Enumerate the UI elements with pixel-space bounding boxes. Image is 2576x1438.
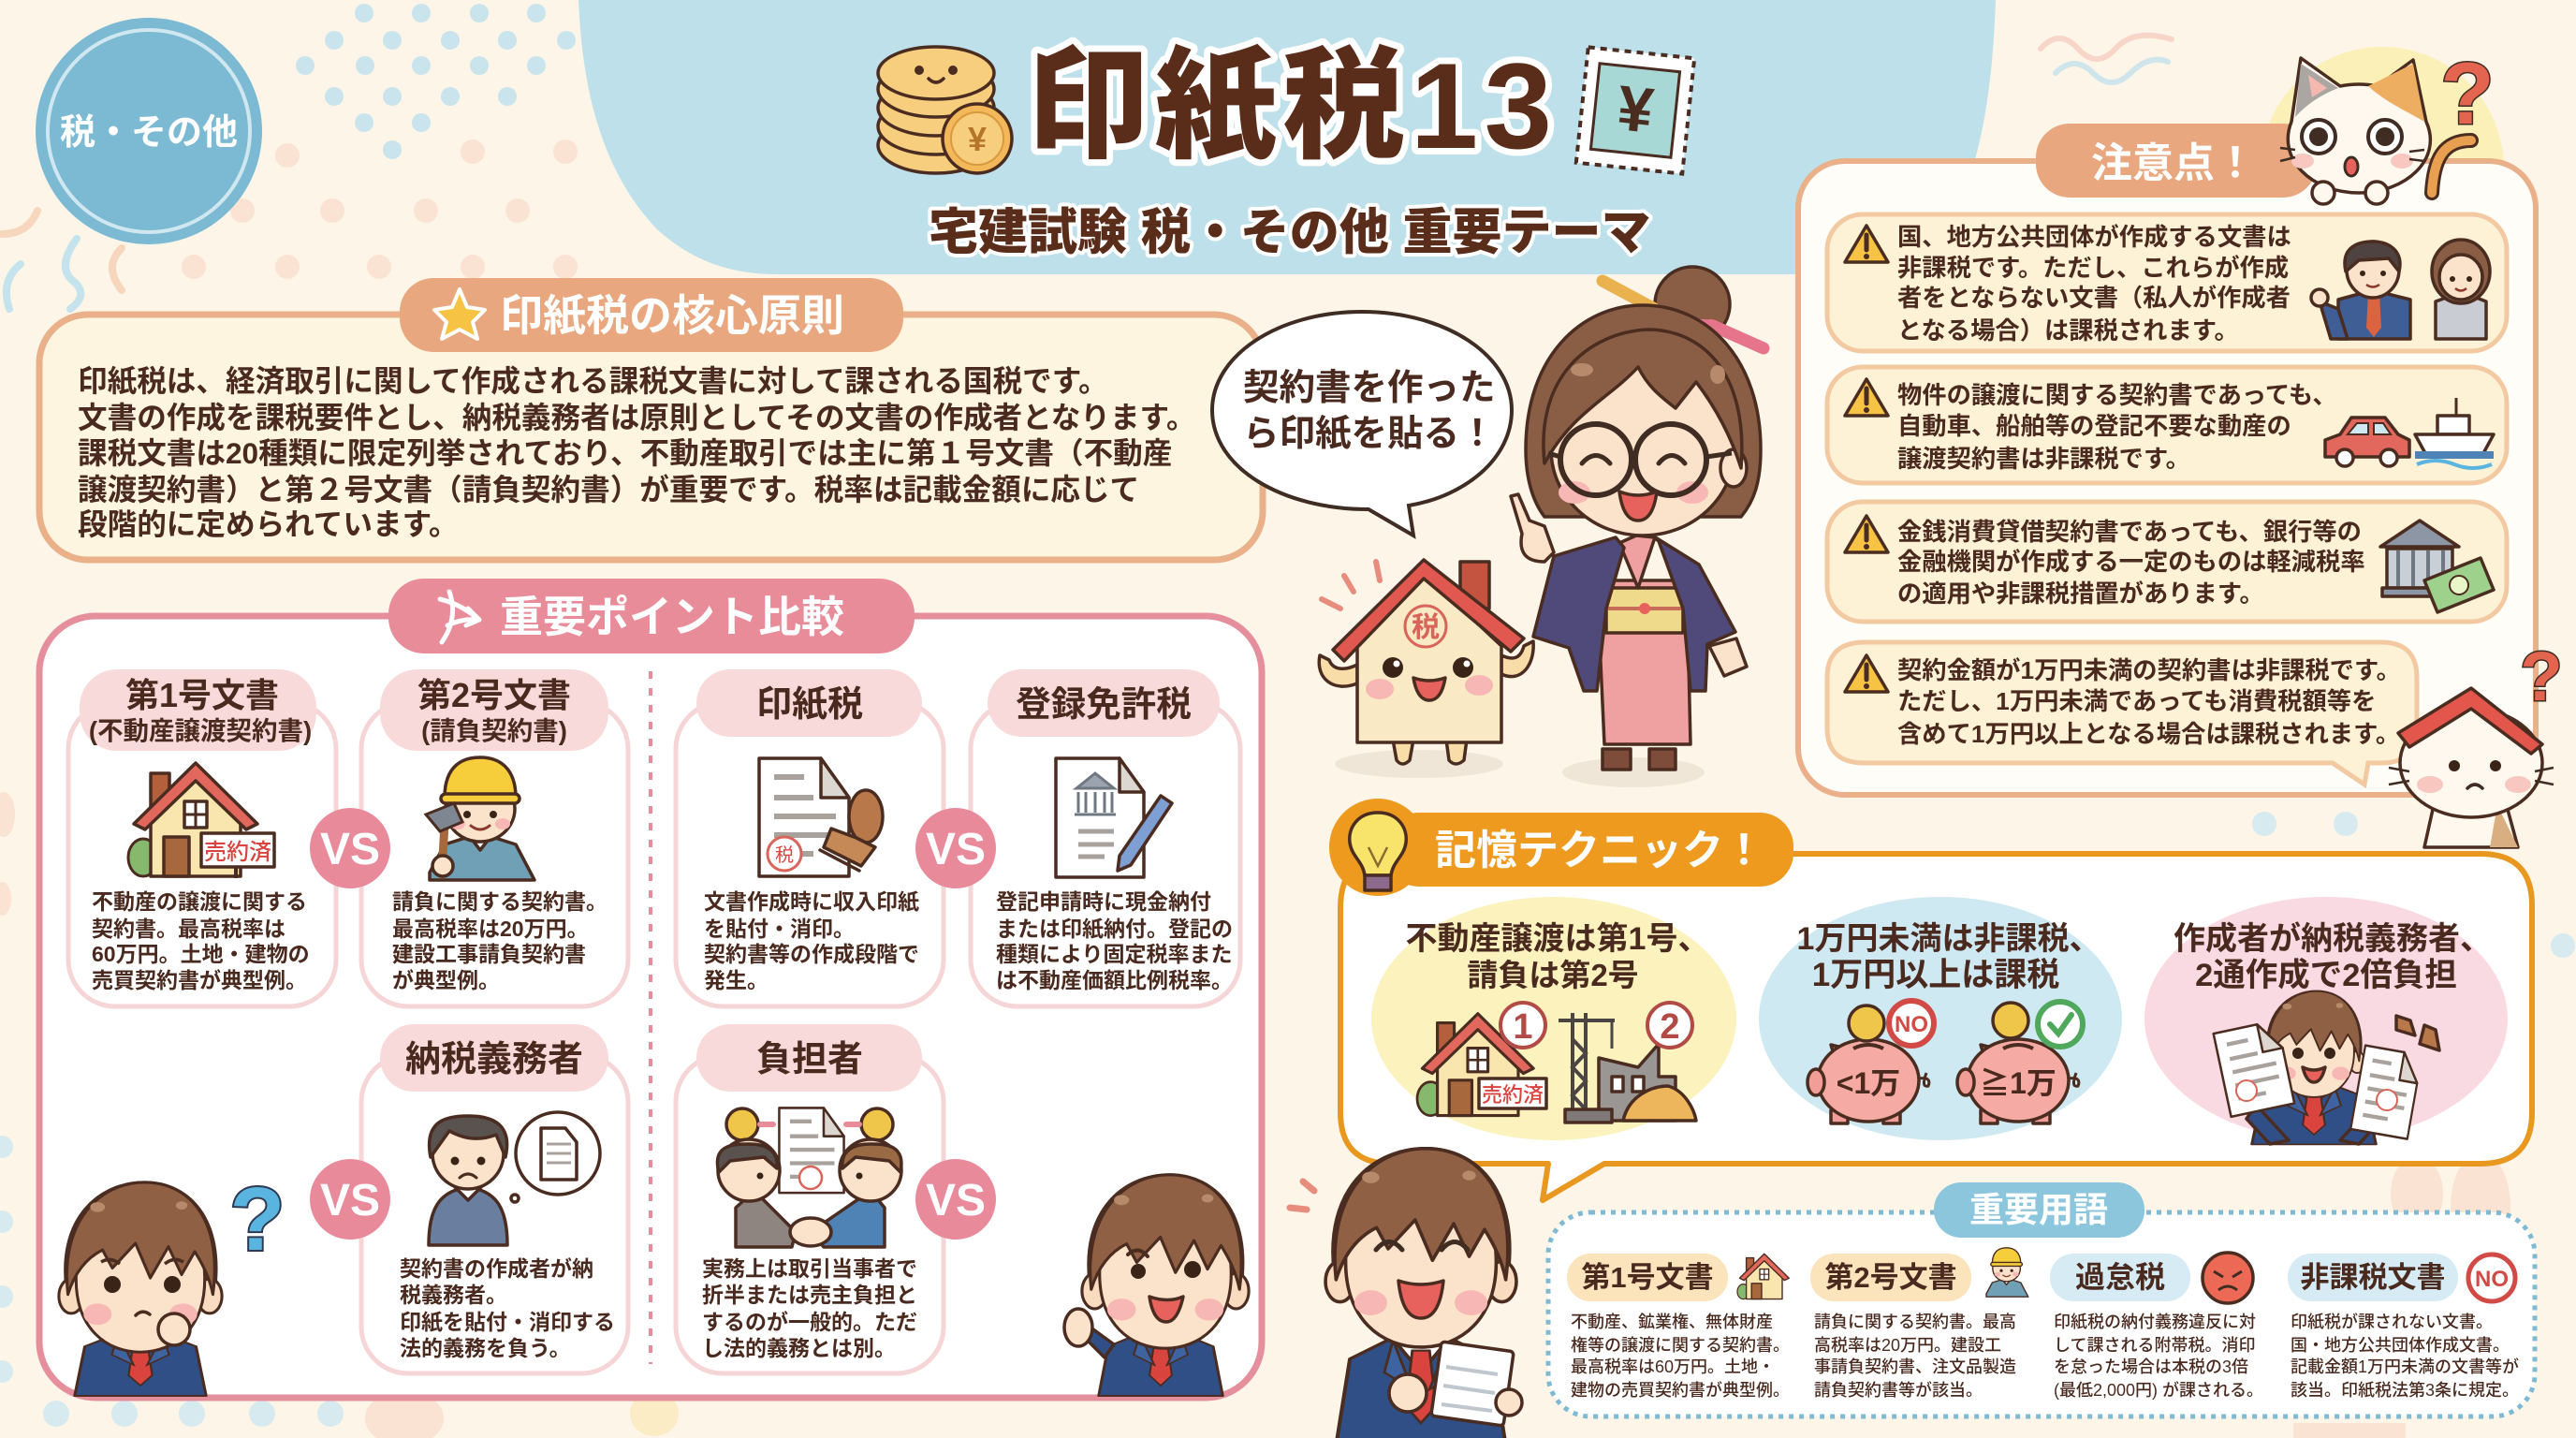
panel: cautions <box>1798 124 2536 795</box>
technique 2: 1万円未満は非課税、 <box>1797 921 2100 957</box>
character: thinking boy <box>59 1169 285 1396</box>
card: registration tax: 種類により固定税率また <box>996 942 1233 966</box>
term: non-taxable document: 印紙税が課されない文書。 <box>2291 1312 2493 1331</box>
card: burden: 実務上は取引当事者で <box>702 1256 917 1281</box>
icon: document with bank and pen <box>1056 758 1172 877</box>
icon: piggy bank under ten thousand: NO <box>1895 1012 1928 1037</box>
VS badge 4: VS <box>926 1176 986 1225</box>
icon: car <box>2325 418 2409 466</box>
technique 1 <box>1371 897 1736 1140</box>
term: document 2: 請負契約書等が該当。 <box>1814 1380 1983 1400</box>
term: document 1: 最高税率は60万円。土地・ <box>1571 1357 1775 1376</box>
speech bubble: teacher <box>1212 312 1512 536</box>
VS badge 2: VS <box>926 825 986 874</box>
category badge: 税・その他 <box>60 113 238 153</box>
heading: glossary: 重要用語 <box>1969 1191 2108 1229</box>
caution 2: 譲渡契約書は非課税です。 <box>1897 445 2190 473</box>
icon: businessman with two documents <box>2214 991 2439 1144</box>
icon: question mark: ? <box>230 1169 285 1269</box>
panel: comparison <box>39 579 1262 1398</box>
technique 2: 1万円以上は課税 <box>1812 957 2059 993</box>
term: non-taxable document: 記載金額1万円未満の文書等が <box>2291 1357 2519 1376</box>
caution 3: の適用や非課税措置があります。 <box>1897 580 2264 608</box>
card: document 1: 60万円。土地・建物の <box>92 942 310 966</box>
term: document 1 <box>1567 1254 1790 1400</box>
card: stamp tax <box>676 669 944 1006</box>
character: house mascot: 税 <box>1412 612 1440 643</box>
term: document 2: 第2号文書 <box>1824 1261 1957 1294</box>
term: penalty tax: 過怠税 <box>2075 1260 2165 1294</box>
body text: 段階的に定められています。 <box>78 507 459 541</box>
category badge <box>36 18 262 244</box>
term: document 2: 高税率は20万円。建設工 <box>1814 1336 2001 1355</box>
caution 1 <box>1827 214 2507 351</box>
caution 2: 物件の譲渡に関する契約書であっても、 <box>1897 381 2337 409</box>
character: boy with notepad <box>1290 1149 1522 1438</box>
title: 印紙税13 <box>1027 37 1552 174</box>
caution 3 <box>1827 502 2507 622</box>
VS badge 1 <box>310 808 390 888</box>
card: document 1: 売買契約書が典型例。 <box>92 968 307 992</box>
caution 4: 含めて1万円以上となる場合は課税されます。 <box>1897 720 2400 748</box>
VS badge 3: VS <box>320 1176 380 1225</box>
term: non-taxable document: 国・地方公共団体作成文書。 <box>2291 1336 2510 1355</box>
VS badge 1: VS <box>320 825 380 874</box>
body text <box>78 364 1196 541</box>
caution 4: 契約金額が1万円未満の契約書は非課税です。 <box>1897 656 2401 684</box>
term: penalty tax: を怠った場合は本税の3倍 <box>2054 1357 2248 1376</box>
VS badge 4 <box>915 1159 996 1240</box>
card: document 2: 最高税率は20万円。 <box>392 917 589 941</box>
icon: light bulb <box>1350 813 1406 890</box>
icon: ship <box>2415 398 2494 468</box>
speech bubble: teacher: 契約書を作った <box>1243 368 1496 408</box>
icon: house for sale <box>128 763 274 878</box>
heading: cautions <box>2036 124 2317 198</box>
caution 2 <box>1827 367 2507 483</box>
technique 2 <box>1759 897 2122 1140</box>
term: document 1: 不動産、鉱業権、無体財産 <box>1571 1313 1773 1331</box>
caution 1: 者をとならない文書（私人が作成者 <box>1897 284 2291 312</box>
caution 4: ただし、1万円未満であっても消費税額等を <box>1897 687 2376 715</box>
card: document 1: (不動産譲渡契約書) <box>89 716 312 745</box>
card: registration tax: 登記申請時に現金納付 <box>996 889 1211 914</box>
card: document 2: (請負契約書) <box>421 716 567 745</box>
character: explaining boy <box>1064 1175 1249 1396</box>
icon: red question mark: ? <box>2440 44 2495 142</box>
icon: arrows <box>440 592 479 642</box>
card: taxpayer: 納税義務者 <box>405 1040 583 1079</box>
caution 3: 金融機関が作成する一定のものは軽減税率 <box>1897 548 2365 576</box>
speech bubble: teacher: ら印紙を貼る！ <box>1243 414 1496 454</box>
icon: coin stack <box>878 47 1012 173</box>
card: registration tax: は不動産価額比例税率。 <box>996 968 1233 992</box>
term: document 2: 事請負契約書、注文品製造 <box>1814 1357 2016 1376</box>
card: document 2 <box>361 669 628 1006</box>
term: non-taxable document <box>2288 1254 2519 1400</box>
icon: handshake with document <box>717 1108 901 1247</box>
body text: 印紙税は、経済取引に関して作成される課税文書に対して課される国税です。 <box>78 364 1108 398</box>
card: burden: するのが一般的。ただ <box>702 1310 917 1334</box>
card: document 1: 第1号文書 <box>125 676 279 714</box>
character: teacher <box>1511 267 1764 787</box>
icon: two people <box>2311 240 2490 339</box>
heading: core principle: 印紙税の核心原則 <box>500 291 844 340</box>
heading: memory techniques: 記憶テクニック！ <box>1435 828 1764 873</box>
icon: postage stamp: ¥ <box>1614 72 1657 147</box>
card: registration tax: または印紙納付。登記の <box>996 917 1233 941</box>
technique 3: 2通作成で2倍負担 <box>2195 958 2457 993</box>
divider <box>649 671 652 1364</box>
header background <box>578 0 1996 274</box>
card: burden: し法的義務とは別。 <box>702 1336 896 1360</box>
caution 2: 自動車、船舶等の登記不要な動産の <box>1897 412 2291 440</box>
icon: house and sign: 売約済 <box>1482 1083 1544 1107</box>
icon: coin stack: ¥ <box>968 120 987 158</box>
icon: document and seal <box>759 758 883 876</box>
VS badge 3 <box>310 1159 390 1240</box>
card: burden <box>676 1024 944 1373</box>
card: stamp tax: 契約書等の作成段階で <box>704 942 919 966</box>
card: stamp tax: 文書作成時に収入印紙 <box>704 889 919 914</box>
icon: worried person with thought bubble <box>429 1112 600 1245</box>
term: penalty tax: 印紙税の納付義務違反に対 <box>2054 1313 2256 1331</box>
heading: memory techniques <box>1329 799 1793 896</box>
term: document 1: 建物の売買契約書が典型例。 <box>1571 1380 1790 1400</box>
term: document 2: 請負に関する契約書。最高 <box>1814 1313 2016 1331</box>
icon: crane and building: 2 <box>1660 1007 1680 1047</box>
icon: postage stamp <box>1576 47 1694 174</box>
card: stamp tax: 印紙税 <box>756 685 863 725</box>
subtitle: 宅建試験 税・その他 重要テーマ <box>929 205 1650 260</box>
caution 4 <box>1827 642 2417 785</box>
icon: bank and money <box>2380 521 2494 612</box>
body text: 譲渡契約書）と第２号文書（請負契約書）が重要です。税率は記載金額に応じて <box>78 473 1139 506</box>
card: document 1: 契約書。最高税率は <box>92 917 285 941</box>
icon: house and sign <box>1417 1003 1546 1116</box>
icon: crane and building <box>1559 1003 1696 1123</box>
icon: document and seal: 税 <box>775 844 794 866</box>
icon: construction worker <box>426 757 534 880</box>
panel: core principle <box>39 278 1263 560</box>
body text: 文書の作成を課税要件とし、納税義務者は原則としてその文書の作成者となります。 <box>78 401 1196 434</box>
card: taxpayer: 税義務者。 <box>400 1283 507 1307</box>
icon: house and sign: 1 <box>1513 1007 1533 1047</box>
icon: piggy bank under ten thousand <box>1808 1001 1934 1123</box>
term: non-taxable document: 非課税文書 <box>2301 1261 2445 1294</box>
caution 1: となる場合）は課税されます。 <box>1897 316 2239 345</box>
caution 3: 金銭消費貸借契約書であっても、銀行等の <box>1897 518 2362 546</box>
technique 1: 不動産譲渡は第1号、 <box>1406 921 1709 957</box>
card: taxpayer <box>361 1024 628 1373</box>
card: document 2: が典型例。 <box>392 968 500 992</box>
body text: 課税文書は20種類に限定列挙されており、不動産取引では主に第１号文書（不動産 <box>78 436 1172 470</box>
icon: piggy bank over ten thousand <box>1957 1002 2083 1123</box>
card: registration tax <box>971 669 1240 1006</box>
character: house mascot <box>1319 560 1533 778</box>
heading: glossary <box>1934 1182 2144 1238</box>
card: document 2: 第2号文書 <box>417 676 571 714</box>
card: document 1: 不動産の譲渡に関する <box>92 889 307 914</box>
VS badge 2 <box>915 808 996 888</box>
term: penalty tax: して課される附帯税。消印 <box>2054 1336 2255 1355</box>
card: stamp tax: 発生。 <box>704 968 768 992</box>
cat backdrop <box>2261 47 2504 290</box>
term: penalty tax <box>2050 1253 2263 1400</box>
card: document 1 <box>68 669 336 1006</box>
heading: core principle <box>400 278 903 352</box>
technique 3: 作成者が納税義務者、 <box>2174 920 2492 957</box>
card: taxpayer: 法的義務を負う。 <box>400 1336 571 1360</box>
card: burden: 負担者 <box>756 1040 863 1079</box>
icon: star <box>434 289 485 339</box>
heading: cautions: 注意点！ <box>2091 140 2256 186</box>
character: worried cat with roof <box>2389 638 2563 847</box>
character: surprised cat <box>2280 44 2495 204</box>
icon: no sign <box>2468 1255 2515 1301</box>
term: document 2 <box>1810 1248 2028 1400</box>
icon: angry face <box>2203 1253 2253 1303</box>
icon: no sign: NO <box>2475 1267 2509 1292</box>
heading: comparison: 重要ポイント比較 <box>500 593 844 641</box>
term: penalty tax: (最低2,000円) が課される。 <box>2054 1380 2263 1400</box>
heading: comparison <box>388 579 915 653</box>
icon: piggy bank over ten thousand: ≧1万 <box>1980 1066 2056 1100</box>
card: document 2: 建設工事請負契約書 <box>392 942 586 966</box>
technique 1: 請負は第2号 <box>1467 958 1639 992</box>
term: non-taxable document: 該当。印紙税法第3条に規定。 <box>2291 1381 2519 1400</box>
term: document 1: 権等の譲渡に関する契約書。 <box>1571 1336 1790 1355</box>
icon: house for sale: 売約済 <box>204 840 271 865</box>
card: burden: 折半または売主負担と <box>702 1283 917 1307</box>
panel: glossary <box>1548 1182 2535 1416</box>
term: document 1: 第1号文書 <box>1581 1261 1714 1294</box>
character: worried cat with roof: ? <box>2520 638 2563 715</box>
technique 3 <box>2144 897 2508 1144</box>
card: taxpayer: 契約書の作成者が納 <box>400 1256 593 1281</box>
caution 1: 非課税です。ただし、これらが作成 <box>1897 254 2289 282</box>
card: stamp tax: を貼付・消印。 <box>704 917 855 941</box>
card: taxpayer: 印紙を貼付・消印する <box>400 1310 615 1334</box>
card: registration tax: 登録免許税 <box>1016 684 1192 724</box>
caution 1: 国、地方公共団体が作成する文書は <box>1897 223 2291 251</box>
panel: memory techniques <box>1329 799 2532 1200</box>
card: document 2: 請負に関する契約書。 <box>392 889 607 914</box>
icon: piggy bank under ten thousand: <1万 <box>1837 1066 1900 1100</box>
